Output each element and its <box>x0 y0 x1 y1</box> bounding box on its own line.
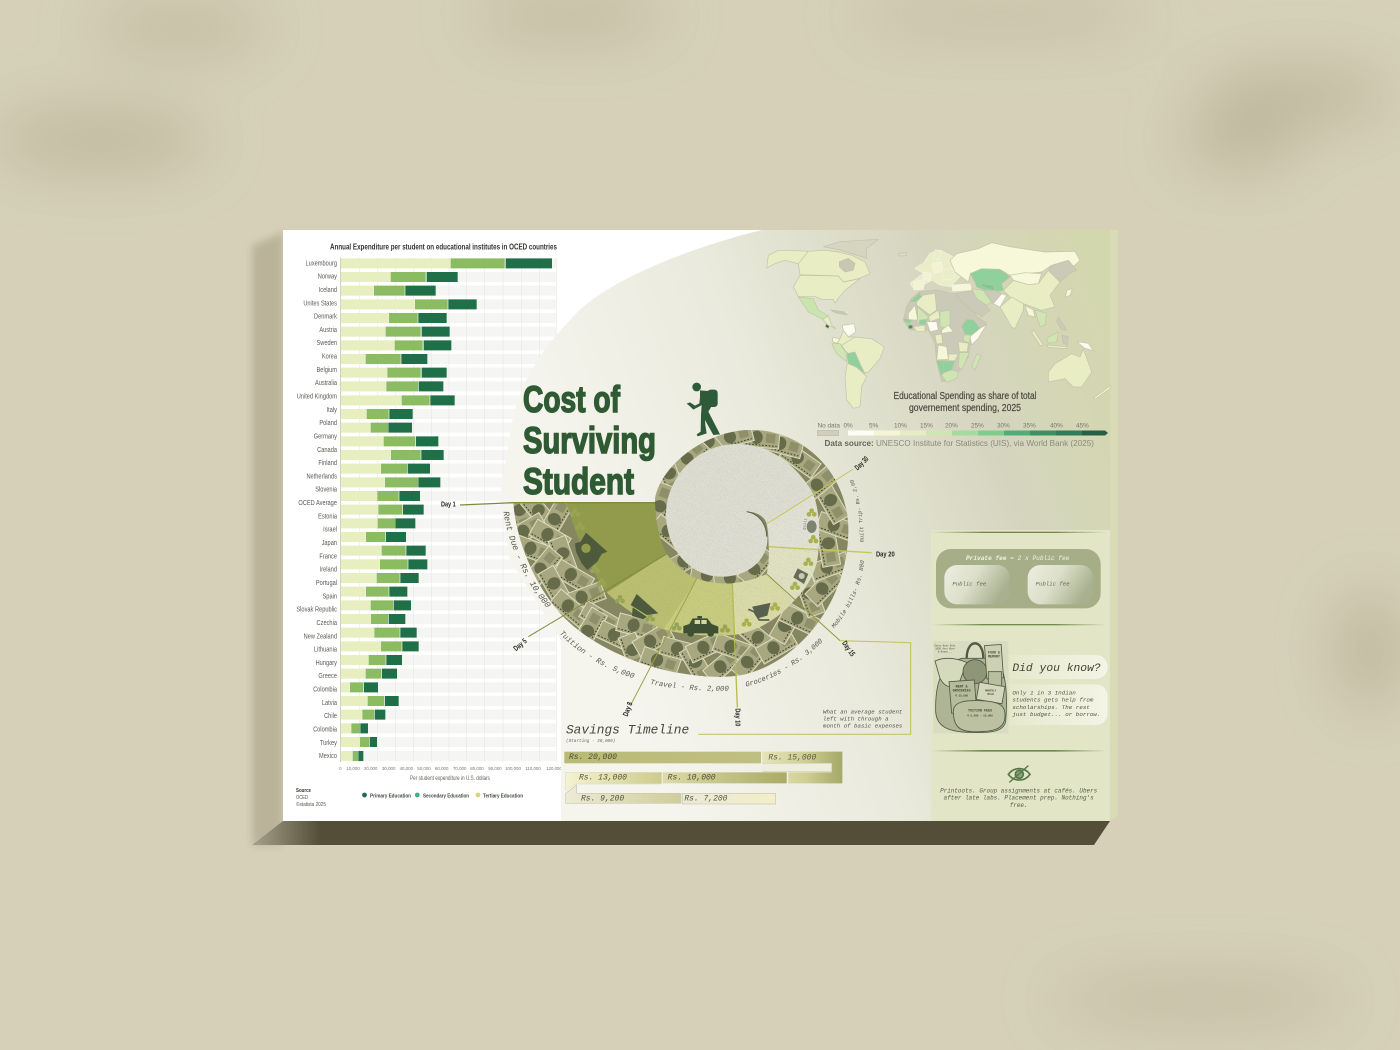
icon: backpack sketch: MEMORY <box>988 654 1000 658</box>
country labels: Slovenia <box>315 486 337 494</box>
country labels: Poland <box>319 420 337 427</box>
curved expense labels: Mobile bills- Rs. 800 <box>832 560 864 628</box>
icon: backpack sketch: MILK <box>987 693 994 696</box>
country labels: Netherlands <box>306 473 337 481</box>
icon: washing machine <box>793 568 808 584</box>
public fee box right: Public fee <box>1036 581 1070 588</box>
bars plot <box>340 257 556 762</box>
icon: backpack sketch: 100% Very More <box>935 648 955 651</box>
country labels: Chile <box>324 713 337 720</box>
title: Surviving <box>523 420 656 461</box>
step: Rs. 9,200: Rs. 9,200 <box>581 795 624 804</box>
icon: backpack sketch: RENT & <box>956 685 968 689</box>
did you know text: scholarships. The rest <box>1012 704 1090 711</box>
curved expense labels: Guilt Trip- Rs. 2,00 <box>850 480 864 542</box>
sector: mobile bills <box>767 547 818 602</box>
map data source: Data source: UNESCO Institute for Statistics (UIS), via World Bank (2025) <box>824 439 1094 448</box>
x axis tick labels: 30,000 <box>382 766 396 771</box>
map legend: 35% <box>1023 422 1036 430</box>
x axis tick labels: 100,000 <box>505 766 521 771</box>
country labels: Iceland <box>319 287 337 294</box>
sector: guilt trip <box>767 494 819 552</box>
icon: car <box>683 616 718 637</box>
day labels: Day 30 <box>853 454 870 472</box>
source note <box>296 788 326 808</box>
x axis tick labels: 10,000 <box>346 766 360 771</box>
spiral wheel of expenses <box>441 430 912 735</box>
step: Rs. 10,000 <box>663 772 787 783</box>
timeline heading: Savings Timeline <box>566 722 689 737</box>
callout: average student note <box>823 708 903 730</box>
north america <box>767 239 878 329</box>
x axis title: Per student expenditure in U.S. dollars <box>410 775 490 782</box>
country labels: Finland <box>318 460 337 467</box>
day labels: Day 10 <box>734 708 743 726</box>
chart legend: Primary Education <box>370 793 411 799</box>
country labels: Austria <box>319 326 337 334</box>
did you know heading <box>1010 655 1108 679</box>
panel: private vs public fee: Private fee = 2 x Public fee <box>966 555 1070 562</box>
title: Student <box>523 461 634 502</box>
did you know text: students gets help from <box>1012 697 1094 704</box>
country labels: Lithuania <box>314 646 337 654</box>
country labels: Greece <box>318 673 337 680</box>
icon: shopping cart <box>748 604 769 620</box>
country labels: Hungary <box>316 659 338 667</box>
icon: crossed-out eye <box>1008 766 1030 782</box>
public fee box right <box>1028 565 1093 604</box>
icon: house <box>575 533 607 570</box>
country labels: Czechia <box>317 619 337 627</box>
country labels: Mexico <box>319 753 337 760</box>
africa <box>903 290 987 382</box>
x axis tick labels: 40,000 <box>400 766 414 771</box>
right column background <box>931 530 1110 821</box>
small trees <box>570 508 730 633</box>
day labels: Day 5 <box>512 636 529 653</box>
country labels: Korea <box>322 353 337 361</box>
curved expense labels <box>503 480 864 692</box>
map legend: 10% <box>894 422 907 430</box>
curved expense labels: Tuition - Rs. 5,000 <box>560 630 634 678</box>
country labels: Sweden <box>317 340 337 347</box>
hidden costs text: Printoots. Group assignments at cafés. Ubers <box>940 787 1098 794</box>
country labels: Ireland <box>320 566 337 574</box>
icon: cooking pot: guilt <box>802 518 809 530</box>
poster card <box>283 230 1118 821</box>
callout: average student note: left with through a <box>823 716 889 722</box>
country labels: Germany <box>314 433 338 441</box>
icon: graduation cap <box>631 594 658 619</box>
chart legend: Tertiary Education <box>483 793 523 799</box>
map legend: 30% <box>997 422 1010 430</box>
chart title: Annual Expenditure per student on educational institutes in OCED countries <box>330 242 557 252</box>
curved expense labels: Rent Due - Rs. 10,000 <box>503 512 551 607</box>
step: Rs. 13,000 <box>566 772 662 790</box>
source note: ©statista 2025 <box>296 801 326 808</box>
x axis tick labels: 50,000 <box>417 766 431 771</box>
step: Rs. 20,000 <box>564 752 761 763</box>
hidden costs text <box>940 787 1098 809</box>
south america <box>832 324 884 408</box>
country labels: Colombia <box>313 686 337 694</box>
world map: educational spending <box>767 239 1111 408</box>
icon: backpack sketch: & Heavy... <box>938 651 952 654</box>
oceania <box>1048 342 1111 399</box>
country labels: Denmark <box>314 313 338 321</box>
callout: average student note: month of basic expenses <box>823 722 903 730</box>
step: Rs. 10,000: Rs. 10,000 <box>668 773 716 782</box>
step: Rs. 9,200 <box>566 785 681 804</box>
public fee box left: Public fee <box>952 581 987 588</box>
title: Cost of <box>523 379 621 420</box>
public fee box left <box>944 565 1010 604</box>
x axis tick labels: 80,000 <box>470 766 484 771</box>
country labels: United Kingdom <box>297 393 337 401</box>
curved expense labels: Groceries - Rs. 3,000 <box>746 638 822 686</box>
asia <box>950 243 1080 349</box>
icon: backpack sketch: FOOD & <box>988 650 1000 654</box>
did you know text <box>1010 684 1108 725</box>
step: Rs. 15,000 <box>762 752 842 783</box>
day labels: Day 1 <box>441 500 456 509</box>
icon: backpack sketch: ₹ 5,000 - 10,000 <box>967 714 993 717</box>
map title: governement spending, 2025 <box>909 403 1021 414</box>
sector: groceries <box>732 574 793 635</box>
country labels: Japan <box>322 540 337 547</box>
country labels: Spain <box>323 593 337 600</box>
card shadow <box>252 232 1110 845</box>
leader lines <box>460 469 911 734</box>
step: Rs. 7,200: Rs. 7,200 <box>684 795 728 804</box>
country labels: Canada <box>317 446 337 454</box>
map legend: 25% <box>971 422 984 430</box>
country labels: Latvia <box>322 699 337 707</box>
step: Rs. 7,200 <box>682 793 776 804</box>
x axis tick labels: 90,000 <box>488 766 502 771</box>
source note: OCED <box>296 795 308 801</box>
map legend: 15% <box>920 422 933 430</box>
sector: travel <box>663 579 733 636</box>
right column content <box>931 532 1108 809</box>
map title: Educational Spending as share of total <box>894 391 1036 402</box>
x axis tick labels: 60,000 <box>435 766 449 771</box>
bar chart: annual expenditure per student <box>296 242 562 808</box>
callout: average student note: What an average student <box>823 708 903 716</box>
icon: backpack sketch <box>933 641 1008 733</box>
chart legend: Secondary Education <box>423 793 469 799</box>
map title <box>894 391 1036 414</box>
country labels: Norway <box>318 273 338 281</box>
did you know heading: Did you know? <box>1012 663 1101 675</box>
step: Rs. 13,000: Rs. 13,000 <box>579 773 627 782</box>
money band <box>513 430 848 677</box>
timeline subheading: (Starting - 30,000) <box>566 739 615 744</box>
map legend: No data <box>818 422 840 430</box>
step: Rs. 20,000: Rs. 20,000 <box>569 753 617 762</box>
country labels: Slovak Republic <box>296 606 338 614</box>
map legend: 20% <box>945 422 958 430</box>
country labels <box>296 260 338 760</box>
map legend: 40% <box>1050 422 1063 430</box>
inner spiral blob <box>666 444 813 577</box>
hidden costs text: after late labs. Placement prep. Nothing's <box>944 795 1094 802</box>
map legend: 5% <box>869 422 879 430</box>
hidden costs text: free. <box>1010 802 1028 809</box>
map legend <box>818 422 1108 448</box>
did you know text: Only 1 in 3 Indian <box>1012 689 1076 696</box>
europe <box>899 250 972 291</box>
x axis tick labels <box>339 766 562 771</box>
country labels: Israel <box>323 526 337 534</box>
icon: backpack sketch: GROCERIES <box>953 689 971 693</box>
day labels: Day 8 <box>621 700 635 718</box>
icon: walking student with backpack <box>687 383 720 436</box>
savings timeline <box>564 722 842 804</box>
sector: tuition <box>607 554 697 629</box>
country labels: France <box>319 553 337 560</box>
country labels: New Zealand <box>304 633 337 640</box>
country labels: Belgium <box>317 366 337 374</box>
step: Rs. 15,000: Rs. 15,000 <box>768 754 816 763</box>
icon: cooking pot <box>802 518 817 533</box>
country labels: Unites States <box>303 300 337 307</box>
did you know text: just budget... or borrow. <box>1011 711 1100 718</box>
icon: backpack sketch: TUITION FEES <box>968 709 992 713</box>
panel: private vs public fee <box>936 549 1101 608</box>
x axis tick labels: 0 <box>339 766 342 771</box>
day labels <box>441 454 895 726</box>
country labels: Portugal <box>316 580 337 587</box>
country labels: Colombia <box>313 726 337 734</box>
x axis tick labels: 20,000 <box>364 766 378 771</box>
country labels: Luxembourg <box>306 260 337 267</box>
chart legend <box>362 793 523 799</box>
country labels: Italy <box>327 406 338 414</box>
country labels: Estonia <box>318 513 337 521</box>
map legend: 45% <box>1076 422 1089 430</box>
x axis tick labels: 110,000 <box>525 766 541 771</box>
country labels: OCED Average <box>298 500 337 507</box>
icon: backpack sketch: Every Note Sets <box>935 645 956 648</box>
country labels: Australia <box>315 380 337 387</box>
x axis tick labels: 120,000 <box>546 766 562 771</box>
source note: Source <box>296 788 312 794</box>
x axis tick labels: 70,000 <box>453 766 467 771</box>
country labels: Turkey <box>320 739 338 747</box>
icon: backpack sketch: MONTHLY <box>985 690 997 693</box>
title <box>523 379 656 502</box>
curved background panel <box>500 230 1110 821</box>
map legend: 0% <box>844 422 853 430</box>
icon: backpack sketch: ₹ 15,000 <box>955 694 968 697</box>
sector: rent <box>567 503 667 593</box>
curved expense labels: Travel - Rs. 2,000 <box>652 679 729 692</box>
day labels: Day 15 <box>840 639 857 658</box>
day labels: Day 20 <box>876 550 895 559</box>
